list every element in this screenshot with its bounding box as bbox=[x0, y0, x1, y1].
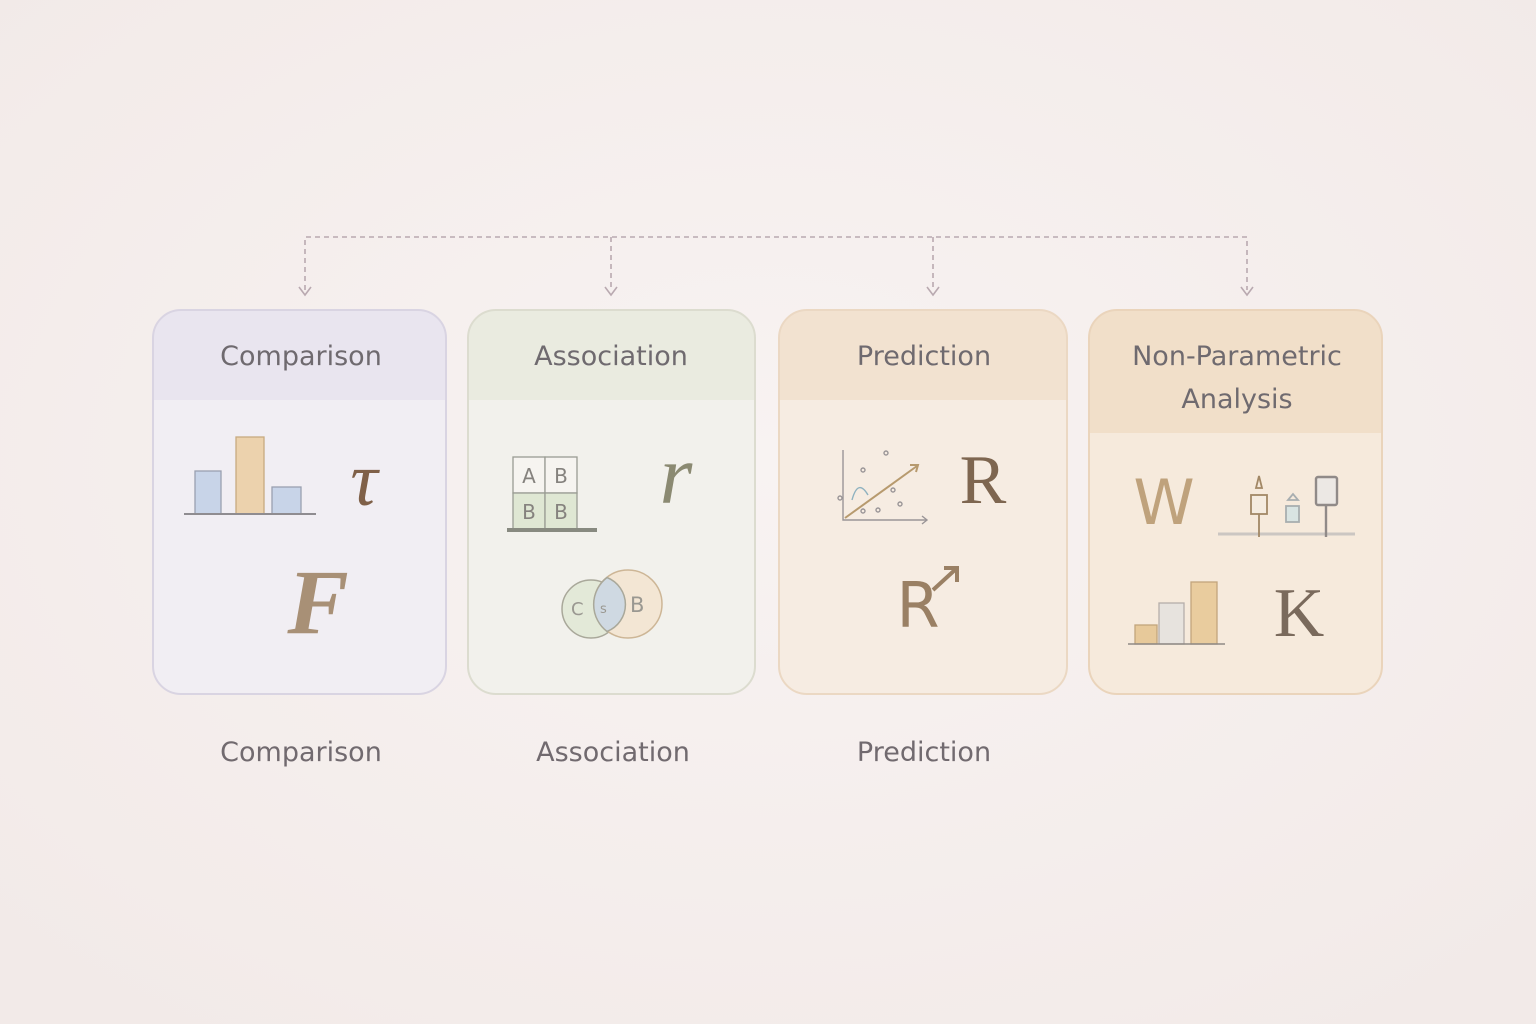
icon: regression scatter bbox=[838, 450, 927, 524]
panel: Association bbox=[468, 310, 755, 694]
symbol: R with arrow: R bbox=[896, 569, 940, 642]
panel: Comparison bbox=[153, 310, 446, 694]
heading: Association: Association bbox=[534, 341, 688, 372]
icon: bar chart bbox=[1128, 582, 1225, 644]
panel: Non-Parametric Analysis: Analysis bbox=[1181, 384, 1293, 415]
icon: contingency grid: B bbox=[554, 464, 568, 488]
icon: contingency grid: B bbox=[522, 500, 536, 524]
symbol: F: F bbox=[286, 551, 349, 653]
heading: Comparison: Comparison bbox=[220, 341, 382, 372]
icon: venn: B bbox=[630, 593, 644, 617]
icon: venn: s bbox=[600, 602, 607, 617]
symbol: R: R bbox=[960, 442, 1007, 519]
panel: Prediction bbox=[779, 310, 1067, 694]
symbol: K: K bbox=[1274, 575, 1324, 652]
caption: Comparison: Comparison bbox=[220, 737, 382, 768]
symbol: tau: τ bbox=[350, 438, 380, 522]
heading: Prediction: Prediction bbox=[857, 341, 991, 372]
icon: box plots bbox=[1218, 476, 1355, 537]
symbol: W: W bbox=[1133, 466, 1195, 539]
heading: Non-Parametric Analysis: Non-Parametric bbox=[1132, 341, 1342, 372]
icon: contingency grid: A bbox=[522, 464, 536, 488]
caption: Association: Association bbox=[536, 737, 690, 768]
icon: venn: C bbox=[571, 599, 584, 620]
icon: contingency grid bbox=[507, 457, 597, 530]
icon: contingency grid: B bbox=[554, 500, 568, 524]
icon: venn bbox=[562, 570, 662, 638]
connector: dashed bracket bbox=[299, 237, 1253, 295]
symbol: r: r bbox=[660, 429, 693, 522]
icon: bar chart bbox=[184, 437, 316, 514]
panel: Non-Parametric Analysis bbox=[1089, 310, 1382, 694]
caption: Prediction: Prediction bbox=[857, 737, 991, 768]
